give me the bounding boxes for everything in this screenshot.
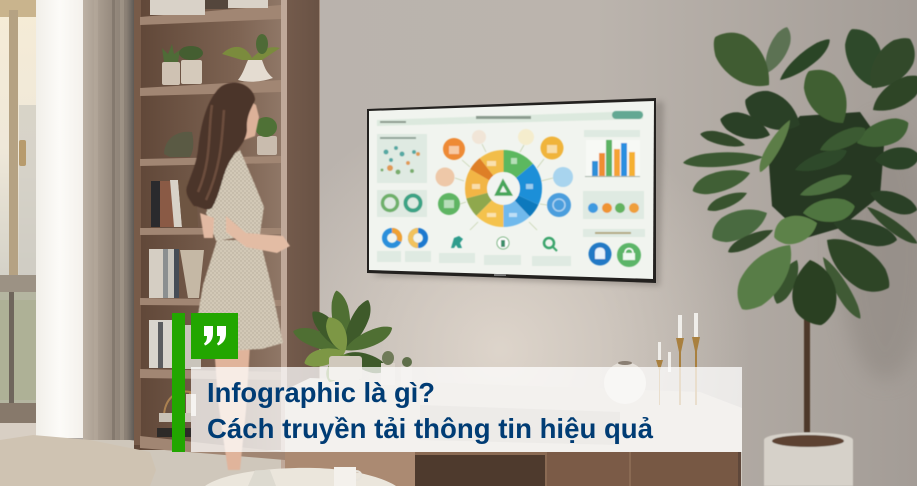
window: [0, 0, 40, 445]
sheer curtain: [36, 0, 83, 438]
potted plant on console: [291, 289, 396, 385]
bottom icons with captions: [439, 236, 571, 266]
infographic on screen: [377, 111, 645, 267]
screen header: [377, 111, 643, 126]
plants second shelf: [164, 117, 277, 157]
bar chart: [584, 130, 640, 177]
TV shadow: [372, 100, 664, 286]
forward arm: [226, 216, 290, 253]
coffee table: [205, 467, 396, 486]
legs: [214, 345, 250, 470]
round white vase: [604, 361, 646, 404]
wheel connectors: [455, 144, 553, 230]
basket and stacked books: [157, 392, 196, 437]
small succulents: [381, 351, 412, 386]
donut charts: [377, 230, 431, 262]
hair: [186, 82, 255, 209]
green quote square: [191, 313, 238, 359]
taupe curtain: [83, 0, 134, 445]
translucent panel: [191, 367, 742, 452]
TV: [367, 98, 656, 283]
plant shadow on wall: [840, 120, 917, 380]
skirt: [193, 240, 283, 351]
ring of icon circles: [436, 129, 573, 217]
bodice: [206, 150, 264, 241]
network map panel: [377, 134, 427, 183]
dark foliage mass: [768, 112, 884, 238]
leaves: [683, 21, 917, 329]
small legend bar: [583, 229, 645, 237]
face: [238, 98, 259, 140]
back arm: [200, 213, 214, 238]
woman: [186, 82, 290, 470]
quote mark: [204, 326, 226, 346]
books fourth shelf: [149, 249, 204, 298]
fiddle leaf plant: [683, 21, 917, 486]
sleeve: [223, 168, 250, 216]
wheel chart: [476, 161, 531, 216]
green rings panel: [377, 190, 427, 217]
books fifth shelf: [149, 320, 201, 369]
title card: [172, 313, 742, 452]
green bar: [172, 313, 185, 452]
shelf boards: [140, 5, 285, 460]
ottoman: [0, 435, 156, 486]
heading: Infographic là gì?: [207, 377, 435, 408]
planter: [764, 432, 853, 486]
badge panel: [583, 191, 644, 219]
big round icons: [588, 242, 641, 267]
console table: [285, 378, 742, 486]
wheel centre recycling icon: [488, 172, 520, 204]
potted plants top shelf: [162, 34, 280, 85]
wheel labels: [472, 158, 533, 217]
floor: [0, 440, 300, 486]
bookshelf: [134, 0, 320, 470]
books third shelf: [151, 180, 198, 227]
trunk: [804, 318, 810, 443]
heading: [207, 377, 654, 444]
heading: Cách truyền tải thông tin hiệu quả: [207, 413, 654, 444]
books top: [150, 0, 268, 15]
candles: [656, 313, 700, 405]
